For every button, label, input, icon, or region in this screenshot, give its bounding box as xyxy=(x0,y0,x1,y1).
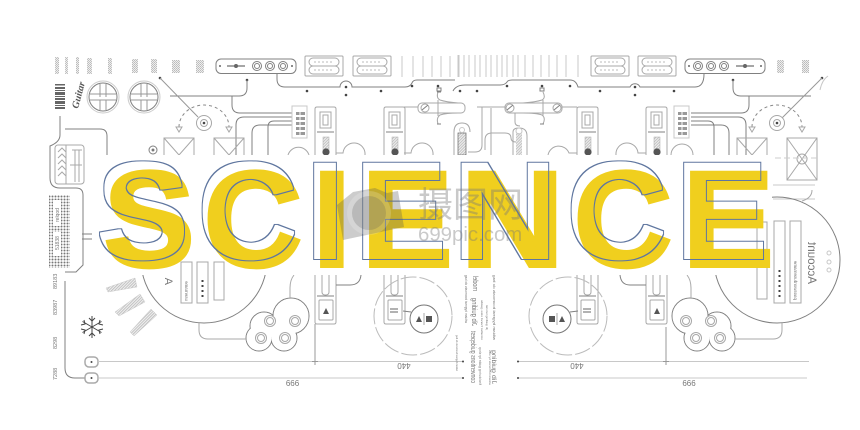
left side wires xyxy=(50,116,107,378)
connector left xyxy=(292,106,307,138)
cloud left xyxy=(246,298,309,351)
SCIENCE yellow letters: E xyxy=(683,143,773,295)
bus wires top xyxy=(277,74,704,91)
vertical text block: model xyxy=(471,276,478,291)
SCIENCE yellow letters: C xyxy=(574,143,672,295)
form rows right circle xyxy=(757,221,801,303)
vertical text block: wikiam bygreat boomcats do bag xyxy=(455,335,459,371)
vertical text block: smaller hand size guide xyxy=(480,300,484,340)
rotated scale labels: 89183 xyxy=(53,274,59,289)
humps above letters xyxy=(288,143,693,155)
round dial right xyxy=(128,81,160,113)
rotated scale labels: 83987 xyxy=(53,300,59,315)
rotated grid labels: relqod xyxy=(55,208,61,222)
form rows left circle xyxy=(162,262,224,303)
SCIENCE outline letters: S xyxy=(97,135,188,288)
bridge left xyxy=(404,88,465,124)
SCIENCE yellow letters: I xyxy=(313,143,351,295)
bridge right xyxy=(477,88,577,124)
form rows right circle: passwordusername xyxy=(793,260,798,300)
lower modules xyxy=(315,275,667,324)
dimension label 666 right: 666 xyxy=(682,379,696,388)
pill dots xyxy=(90,361,92,379)
watermark camera xyxy=(337,188,404,240)
dimension end dots xyxy=(462,360,519,379)
SCIENCE yellow letters: S xyxy=(104,143,194,295)
cloud right xyxy=(672,298,735,351)
account label: Account xyxy=(805,241,817,284)
control plate left xyxy=(216,59,296,74)
snowflake icon xyxy=(81,316,103,338)
round dial left xyxy=(87,81,119,113)
envelopes xyxy=(164,138,817,180)
center wires xyxy=(468,107,520,155)
big circle left xyxy=(141,197,267,323)
SCIENCE outline letters: E xyxy=(676,135,767,288)
vertical text block: conventions guidepest xyxy=(469,331,476,383)
wedge icons xyxy=(106,278,157,336)
vertical text block: Jib guiding xyxy=(490,350,497,384)
dimension label 440 right: 440 xyxy=(570,361,584,370)
rotated scale labels: 8298 xyxy=(53,337,59,349)
connection dots xyxy=(159,77,823,96)
dashed circle left xyxy=(374,277,452,355)
watermark url: 699pic.com xyxy=(418,224,522,246)
SCIENCE yellow letters: E xyxy=(362,143,452,295)
rotated grid labels xyxy=(53,200,61,256)
SCIENCE outline letters: C xyxy=(198,135,297,288)
vertical text block: find during guide by shop xyxy=(478,347,482,385)
right side small lines xyxy=(773,76,828,199)
top hatched strips right xyxy=(777,60,809,73)
vertical text block: wikiam boomcats by size xyxy=(488,350,492,385)
connector right xyxy=(674,106,689,138)
left wiring to connector xyxy=(170,80,292,155)
big circle right xyxy=(714,197,840,323)
form rows left circle: username xyxy=(184,280,189,301)
target with dashed arc right xyxy=(749,105,805,132)
left panel xyxy=(55,145,84,184)
bubble left with shapes xyxy=(403,305,438,333)
right side strokes xyxy=(775,157,820,159)
white mask behind letters xyxy=(92,155,772,275)
SCIENCE yellow letters: N xyxy=(461,144,564,295)
vertical text block: Jib guiding xyxy=(470,298,477,326)
dimension pills xyxy=(85,357,98,383)
diagonal pointers xyxy=(160,78,822,118)
dimension label 440 left: 440 xyxy=(397,361,411,370)
target with dashed arc left xyxy=(176,105,232,132)
SCIENCE outline letters xyxy=(97,134,767,288)
SCIENCE outline letters: N xyxy=(453,134,557,287)
cloud wires xyxy=(199,190,812,339)
rotated grid labels: 51838 xyxy=(55,236,61,250)
SCIENCE yellow letters: C xyxy=(204,143,302,295)
SCIENCE outline letters: E xyxy=(355,135,446,288)
rotated scale labels xyxy=(53,274,59,380)
guitar logo: Guitar xyxy=(70,81,88,110)
upper modules xyxy=(315,107,667,156)
control plate right xyxy=(685,59,765,74)
account small rings xyxy=(827,251,831,272)
lower module wires xyxy=(336,275,646,285)
small ring xyxy=(149,146,157,154)
vertical text block: wikiam bygreat boomcats do bag xyxy=(492,275,496,340)
SCIENCE yellow letters xyxy=(104,143,773,295)
vertical text block xyxy=(455,275,497,385)
dashed circle right xyxy=(529,277,607,355)
vertical tick ruler xyxy=(402,55,578,77)
dimension ticks xyxy=(312,324,669,365)
watermark text: 摄图网 xyxy=(418,186,523,225)
right wiring to connector xyxy=(691,80,811,155)
dimension lines xyxy=(98,362,809,378)
dimension label 666 left: 666 xyxy=(286,379,300,388)
barcode xyxy=(55,84,65,109)
top hatched strips left xyxy=(55,57,204,74)
rotated scale labels: 7288 xyxy=(53,368,59,380)
vertical text block: wikiam bygreat boomcats do bag xyxy=(464,275,468,323)
bubble right with shapes xyxy=(543,305,578,333)
pickups xyxy=(305,56,676,76)
SCIENCE outline letters: I xyxy=(306,135,344,288)
center neck strips xyxy=(454,123,527,155)
dotted speaker grid xyxy=(49,195,70,268)
form rows left circle: A xyxy=(162,277,174,285)
SCIENCE outline letters: C xyxy=(567,135,666,288)
vertical text block: jib guiding tutorial xyxy=(485,305,489,331)
